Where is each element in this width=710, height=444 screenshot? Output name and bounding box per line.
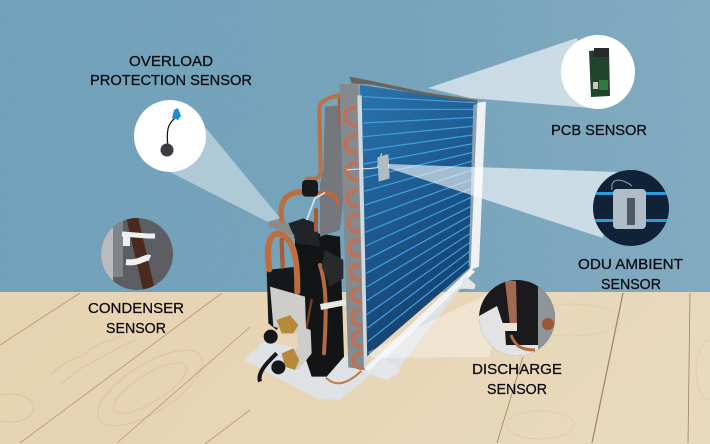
label line two: SENSOR — [487, 381, 547, 398]
copper return bends — [345, 108, 362, 368]
label: ODU AMBIENT — [578, 256, 683, 273]
photo circle — [593, 170, 669, 246]
callout: ODU ambient sensor — [578, 170, 683, 293]
coil left edge frame — [357, 95, 367, 370]
icon: overload sensor — [160, 108, 181, 156]
copper pipes — [268, 95, 361, 383]
light beam: overload sensor — [170, 128, 280, 222]
service valve panel — [270, 287, 312, 370]
tube plate — [339, 84, 365, 370]
circle white — [134, 100, 206, 172]
ambient sensor wire — [347, 153, 382, 170]
right white post — [470, 102, 486, 270]
overload sensor cover — [268, 220, 295, 237]
black insulation wrap — [322, 250, 343, 287]
coil bottom rail — [365, 268, 475, 373]
photo circle — [479, 280, 555, 356]
heading: OVERLOAD — [129, 53, 213, 70]
mounting foot bottom — [368, 357, 400, 380]
coil top frame — [349, 77, 477, 102]
label: PCB SENSOR — [551, 122, 647, 139]
white pipe — [320, 297, 358, 310]
accumulator — [267, 267, 298, 330]
label line two: SENSOR — [601, 276, 661, 293]
sensor clamp and wire — [307, 193, 325, 220]
callout: PCB sensor — [551, 35, 647, 139]
light beam: ambient sensor — [388, 164, 617, 238]
wooden floor — [0, 292, 710, 444]
heading line two: PROTECTION SENSOR — [90, 72, 252, 89]
callout: condenser sensor — [88, 217, 184, 337]
gray partition — [320, 105, 345, 237]
circle white — [561, 35, 635, 109]
compressor body — [295, 230, 344, 377]
light beam: discharge sensor — [368, 288, 500, 358]
label line two: SENSOR — [106, 320, 166, 337]
label: CONDENSER — [88, 300, 184, 317]
label: DISCHARGE — [472, 361, 562, 378]
photo circle — [100, 217, 175, 292]
callout: discharge sensor — [472, 280, 562, 398]
callout: overload protection sensor — [90, 53, 252, 172]
light beam: PCB sensor — [428, 38, 590, 108]
mounting foot right — [462, 277, 476, 289]
coil fins — [363, 97, 476, 342]
coil — [360, 85, 477, 357]
ambient sensor on coil — [377, 154, 390, 182]
black valve — [302, 180, 318, 197]
outdoor unit — [244, 77, 486, 400]
icon: circuit board — [589, 48, 610, 97]
brass service valves — [259, 315, 299, 382]
wall background — [0, 0, 710, 292]
base plate — [244, 279, 475, 400]
compressor top cap — [288, 218, 320, 247]
